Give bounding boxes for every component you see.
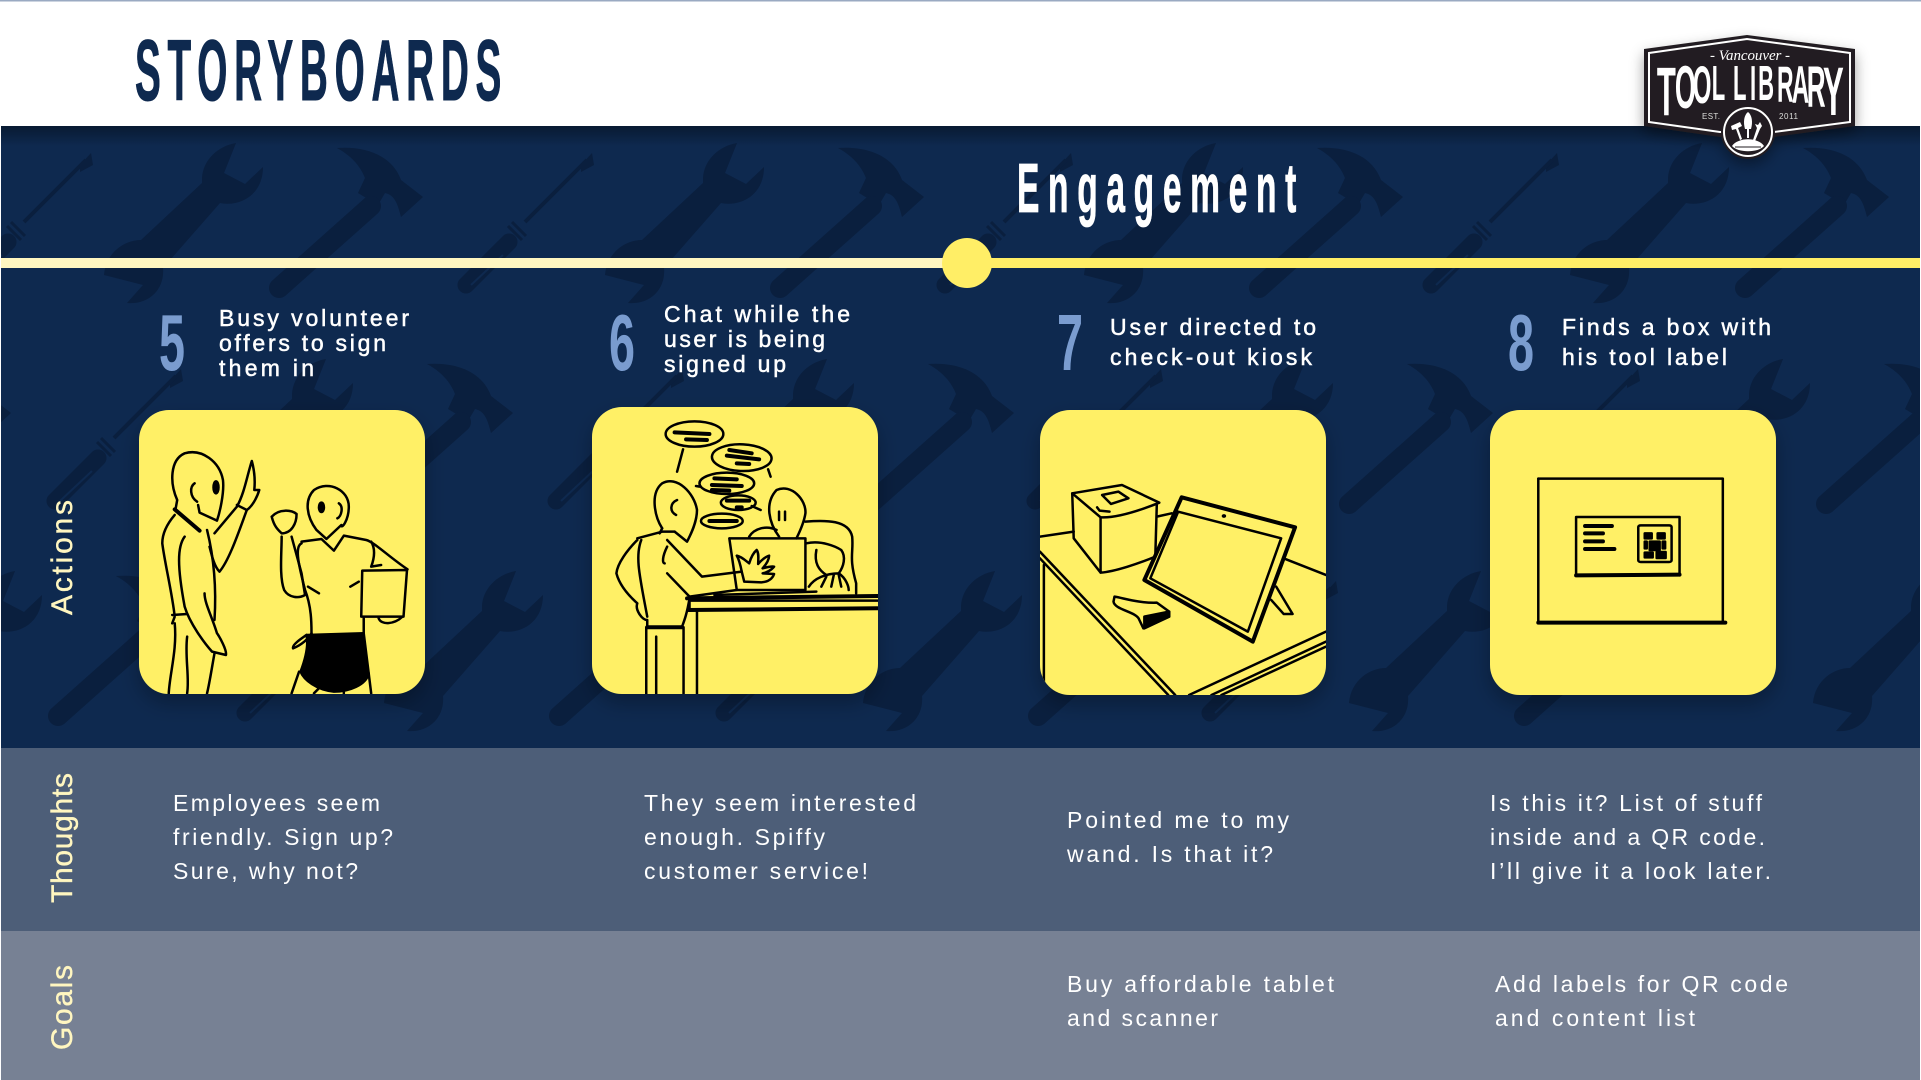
logo: Vancouver Tool Library: R xyxy=(1777,57,1794,114)
panel: thoughts band xyxy=(1,748,1920,931)
step 8 heading: his tool label xyxy=(1562,344,1727,370)
card 5: volunteer greets visitor xyxy=(139,410,425,694)
step 8 heading: Finds a box with xyxy=(1562,314,1771,340)
thought 8: I’ll give it a look later. xyxy=(1490,858,1771,884)
thought 7: wand. Is that it? xyxy=(1066,841,1273,867)
thought 6 xyxy=(644,790,916,884)
logo: Vancouver Tool Library: R xyxy=(1807,54,1826,120)
card 6: chat at the desk xyxy=(592,407,878,695)
logo: Vancouver Tool Library: I xyxy=(1750,57,1756,112)
card 7: check-out kiosk xyxy=(1040,410,1326,695)
step 7 heading: check-out kiosk xyxy=(1110,344,1312,370)
thought 7 xyxy=(1066,807,1290,867)
logo: Vancouver Tool Library xyxy=(1644,35,1855,159)
thought 6: enough. Spiffy xyxy=(644,824,826,850)
thought 8: inside and a QR code. xyxy=(1490,824,1765,850)
goal 7 xyxy=(1067,971,1335,1031)
step 5 heading: offers to sign xyxy=(219,330,386,356)
logo: Vancouver Tool Library: Y xyxy=(1823,54,1844,130)
logo: Vancouver Tool Library: A xyxy=(1792,55,1809,115)
logo: Vancouver Tool Library: 2011 xyxy=(1779,112,1799,121)
step 5 heading: 5 xyxy=(159,298,185,387)
thought 6: They seem interested xyxy=(644,790,916,816)
step 6 heading: signed up xyxy=(664,351,786,377)
logo: Vancouver Tool Library: O xyxy=(1675,54,1696,121)
step 8 heading: 8 xyxy=(1508,298,1534,387)
logo: Vancouver Tool Library: L xyxy=(1712,57,1731,112)
timeline xyxy=(1,238,1920,288)
panel: goals band xyxy=(1,931,1920,1080)
step 5 heading xyxy=(159,298,409,387)
row label: Actions: Actions xyxy=(46,500,79,615)
step 5 heading: them in xyxy=(219,355,314,381)
goal 8: Add labels for QR code xyxy=(1495,971,1788,997)
goal 7: and scanner xyxy=(1067,1005,1218,1031)
panel: actions band xyxy=(0,126,1921,748)
thought 5 xyxy=(173,790,393,884)
step 6 heading: Chat while the xyxy=(664,301,850,327)
step 6 heading: 6 xyxy=(609,298,635,387)
step 7 heading xyxy=(1057,298,1316,387)
thought 5: friendly. Sign up? xyxy=(173,824,393,850)
row label: Goals: Goals xyxy=(46,965,79,1050)
thought 6: customer service! xyxy=(644,858,868,884)
step 7 heading: User directed to xyxy=(1110,314,1316,340)
logo: Vancouver Tool Library: L xyxy=(1733,57,1746,112)
goal 8 xyxy=(1495,971,1788,1031)
phase heading: Engagement xyxy=(1017,148,1305,227)
thought 5: Employees seem xyxy=(173,790,380,816)
step 7 heading: 7 xyxy=(1057,298,1083,387)
logo: Vancouver Tool Library: B xyxy=(1758,57,1774,112)
step 5 heading: Busy volunteer xyxy=(219,305,409,331)
card 8: box with tool label xyxy=(1490,410,1776,695)
step 6 heading xyxy=(609,298,850,387)
logo: Vancouver Tool Library: EST. xyxy=(1702,112,1720,121)
thought 8 xyxy=(1490,790,1771,884)
goal 7: Buy affordable tablet xyxy=(1067,971,1335,997)
goal 8: and content list xyxy=(1495,1005,1696,1031)
row label: Thoughts: Thoughts xyxy=(46,773,79,903)
step 6 heading: user is being xyxy=(664,326,825,352)
thought 7: Pointed me to my xyxy=(1067,807,1290,833)
step 8 heading xyxy=(1508,298,1771,387)
title: STORYBOARDS xyxy=(135,24,508,119)
logo: Vancouver Tool Library: O xyxy=(1693,55,1711,115)
thought 8: Is this it? List of stuff xyxy=(1490,790,1763,816)
logo: Vancouver Tool Library: T xyxy=(1657,54,1676,130)
thought 5: Sure, why not? xyxy=(173,858,358,884)
logo: Vancouver Tool Library: - Vancouver - xyxy=(1710,48,1790,64)
